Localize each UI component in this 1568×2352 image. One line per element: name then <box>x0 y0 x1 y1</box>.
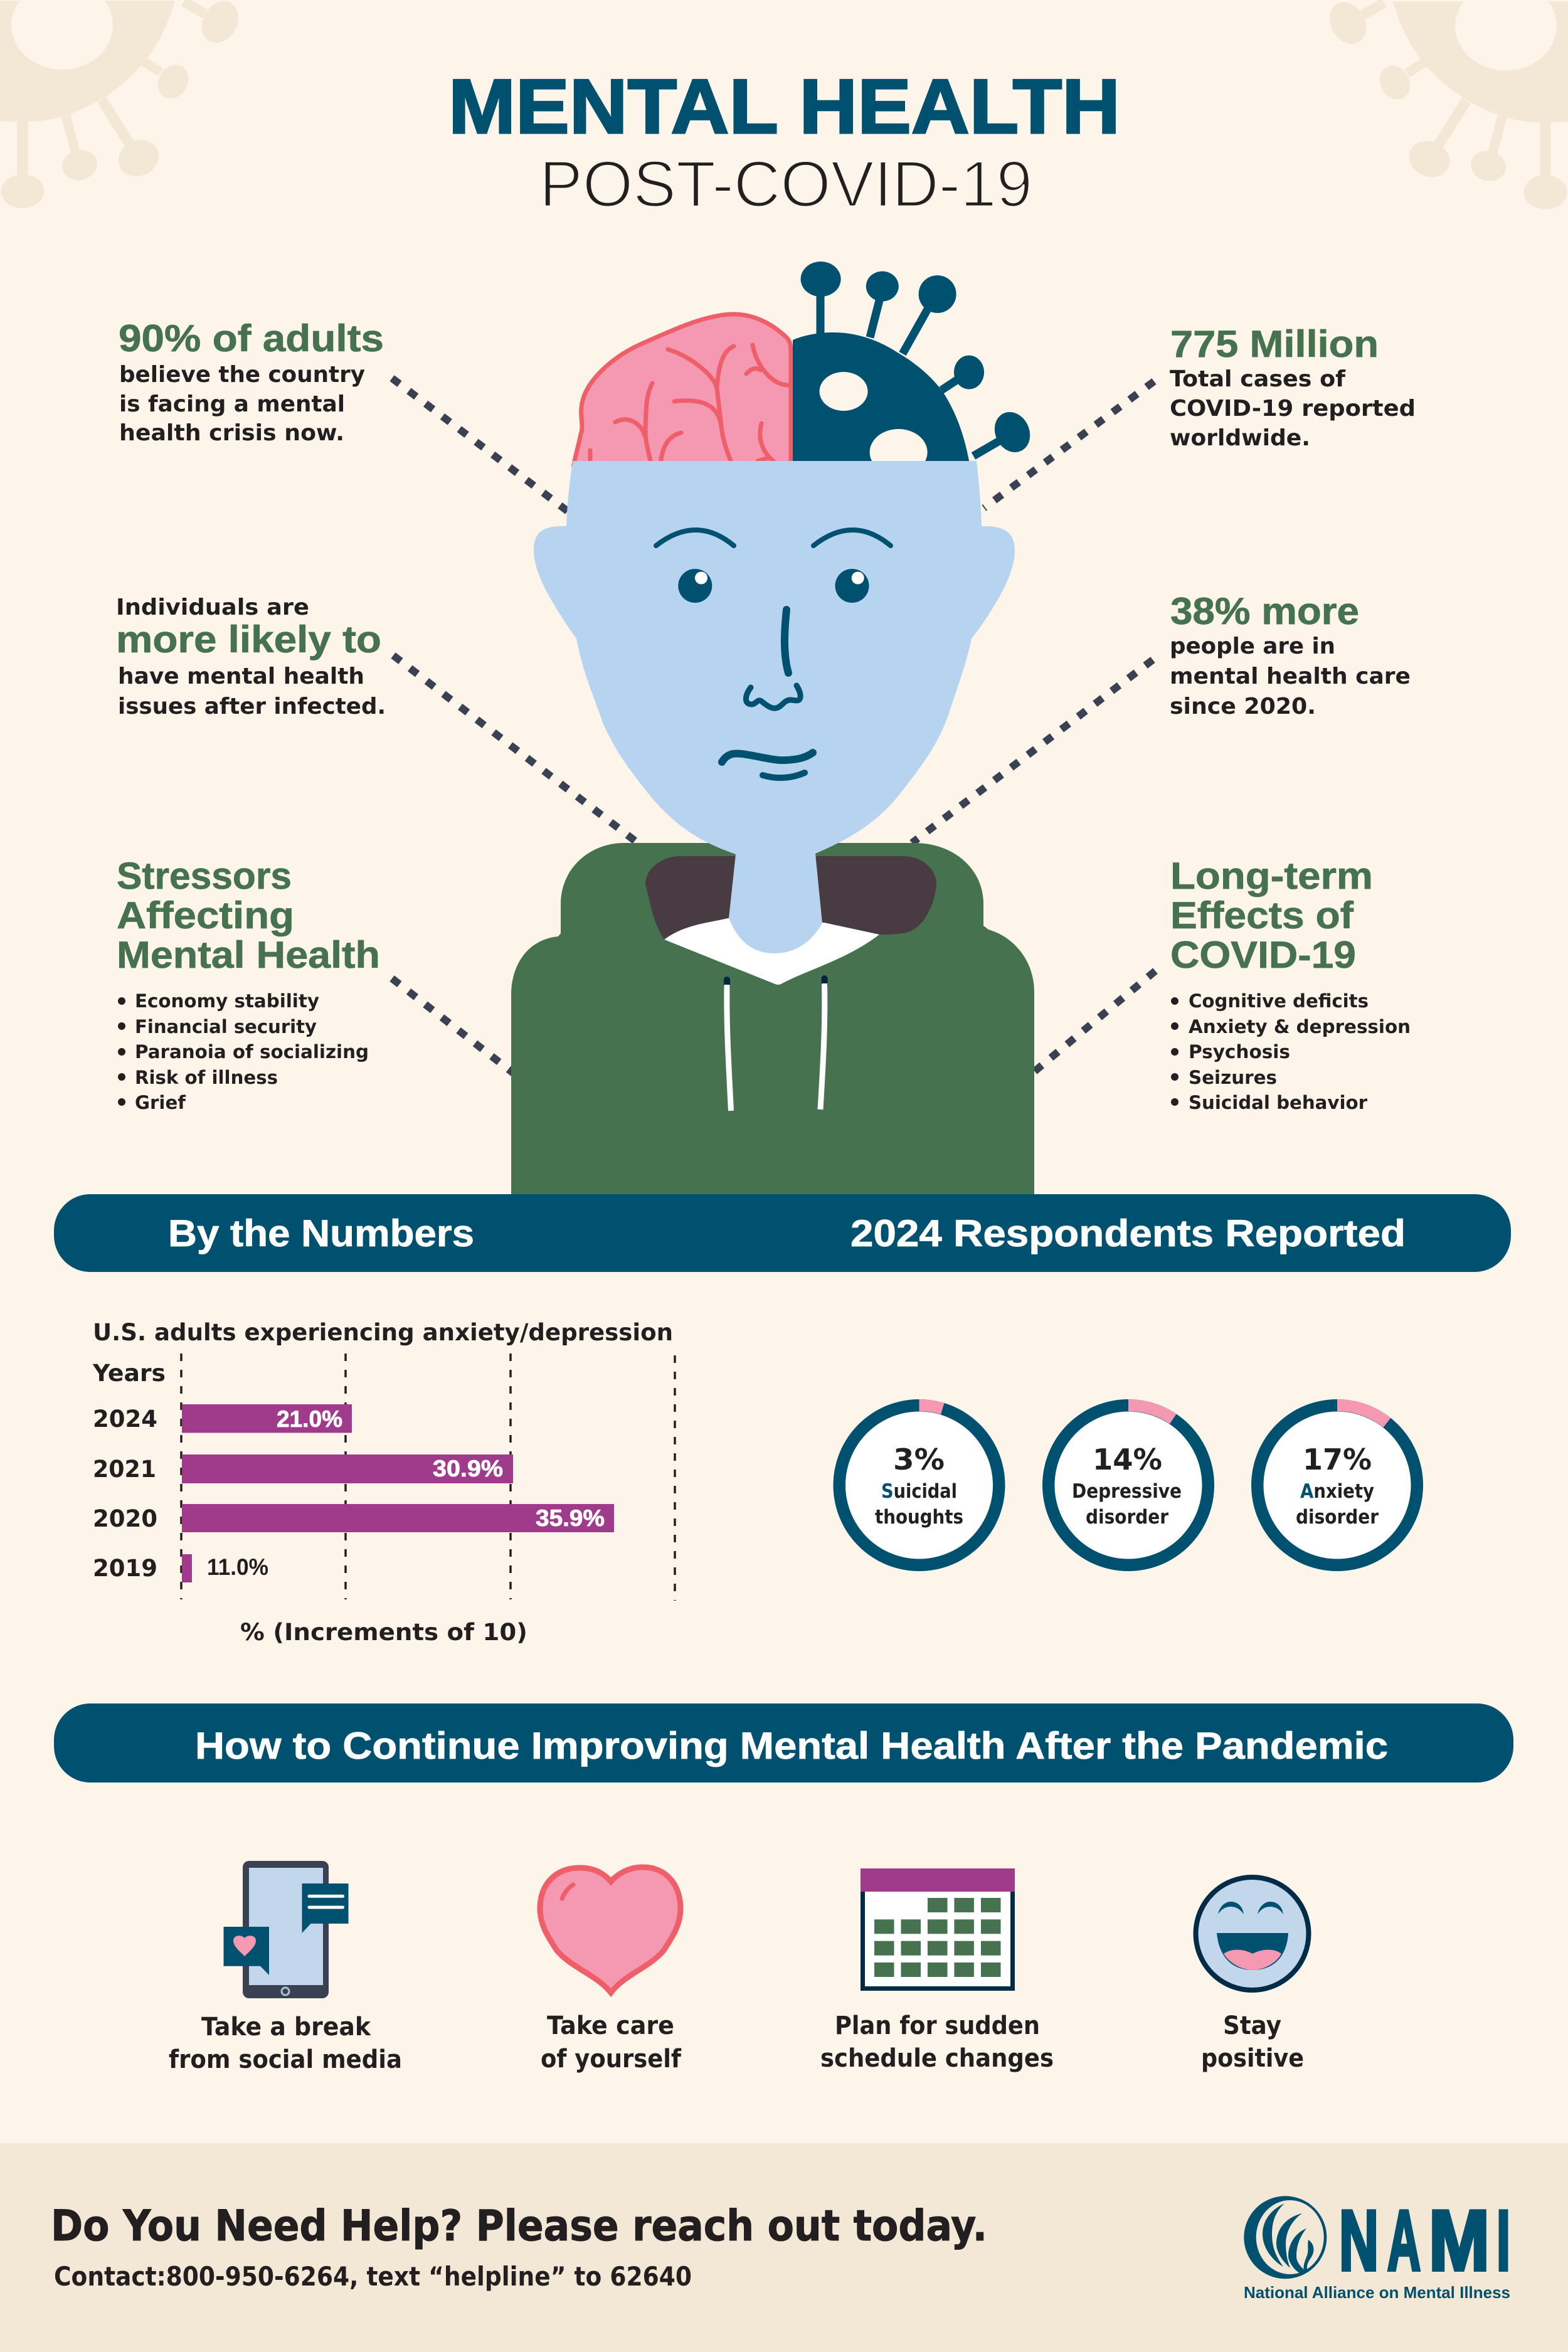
text block: 90% of adults: 90% of adults <box>119 317 384 359</box>
bar chart: U.S. adults experiencing anxiety/depression: U.S. adults experiencing anxiety/depression <box>93 1319 673 1346</box>
bar chart: U.S. adults experiencing anxiety/depression: 11.0% <box>207 1554 268 1580</box>
tip: take care: Take care <box>547 2011 674 2040</box>
icon: virus corner right <box>1322 0 1568 209</box>
donut: anxiety disorder 17%: 17% <box>1303 1443 1372 1476</box>
panel: long-term effects of covid-19: Seizures <box>1189 1067 1277 1088</box>
head <box>534 461 1015 953</box>
text block: 775 Million: 775 Million <box>1170 323 1379 365</box>
tip: take care: of yourself <box>541 2045 682 2074</box>
text block: 38% more <box>1170 590 1411 719</box>
title: MENTAL HEALTH <box>448 64 1120 150</box>
panel: stressors affecting mental health: Risk of illness <box>135 1067 278 1088</box>
icon: smiley <box>1195 1877 1308 1990</box>
footer band <box>0 2143 1568 2352</box>
bar chart: U.S. adults experiencing anxiety/depression: % (Increments of 10) <box>240 1619 527 1646</box>
donut: suicidal thoughts 3%: 3% <box>893 1443 945 1476</box>
text block: more likely to <box>116 595 386 719</box>
banner: by the numbers: By the Numbers <box>168 1212 474 1254</box>
logo: NAMI <box>1244 2193 1510 2302</box>
text block: more likely to: more likely to <box>116 618 381 660</box>
virus half <box>793 262 1036 475</box>
hood lining <box>645 856 936 940</box>
icon: virus corner left <box>0 0 246 208</box>
shirt collar <box>664 918 879 985</box>
donut: depressive disorder 14% <box>1042 1399 1214 1571</box>
donut: suicidal thoughts 3%: thoughts <box>875 1506 963 1528</box>
bar chart: U.S. adults experiencing anxiety/depression <box>92 1319 675 1646</box>
text block: 38% more: people are in <box>1170 633 1335 659</box>
logo: NAMI: N <box>1339 2193 1379 2288</box>
footer band: Do You Need Help? Please reach out today. <box>51 2201 987 2251</box>
text block: 90% of adults: is facing a mental <box>119 391 345 417</box>
panel: long-term effects of covid-19: Suicidal behavior <box>1189 1092 1368 1113</box>
bar chart: U.S. adults experiencing anxiety/depression: 2021 <box>93 1456 156 1483</box>
panel: stressors affecting mental health: Economy stability <box>135 990 319 1012</box>
illustration: person with brain and virus <box>511 262 1036 1194</box>
bar chart: U.S. adults experiencing anxiety/depression: 35.9% <box>536 1505 605 1531</box>
hoodie strings <box>727 978 825 1111</box>
text block: 775 Million: COVID-19 reported <box>1170 396 1416 421</box>
panel: stressors affecting mental health: Grief <box>135 1092 186 1113</box>
tip: social media: Take a break <box>201 2013 371 2042</box>
banner: by the numbers: 2024 Respondents Reported <box>850 1212 1406 1254</box>
title: POST-COVID-19 <box>539 148 1032 221</box>
donut: anxiety disorder 17% <box>1251 1399 1423 1571</box>
bar chart: U.S. adults experiencing anxiety/depression: 21.0% <box>277 1406 342 1432</box>
panel: long-term effects of covid-19: Effects of <box>1170 894 1354 936</box>
donut: suicidal thoughts 3%: Suicidal <box>881 1480 957 1503</box>
icon: heart <box>540 1867 681 1993</box>
panel: stressors affecting mental health: Paranoia of socializing <box>135 1041 369 1062</box>
hoodie <box>511 843 1034 1194</box>
panel: long-term effects of covid-19: Long-term <box>1170 855 1373 897</box>
bar chart: U.S. adults experiencing anxiety/depression: 2024 <box>93 1406 157 1433</box>
text block: more likely to: Individuals are <box>116 595 309 620</box>
bar chart: U.S. adults experiencing anxiety/depression: 30.9% <box>433 1456 503 1481</box>
donut: anxiety disorder 17%: disorder <box>1296 1506 1379 1528</box>
donut: suicidal thoughts 3% <box>833 1399 1005 1571</box>
tip: schedule: schedule changes <box>820 2044 1054 2073</box>
footer band: Contact:800-950-6264, text “helpline” to 62640 <box>54 2261 692 2292</box>
tip: stay positive <box>1195 1877 1308 2073</box>
banner: by the numbers <box>54 1194 1511 1272</box>
text block: 38% more: since 2020. <box>1170 694 1316 719</box>
panel: long-term effects of covid-19: Cognitive deficits <box>1189 990 1369 1012</box>
text block: 38% more: 38% more <box>1170 590 1359 632</box>
bar chart: U.S. adults experiencing anxiety/depression: 2019 <box>93 1555 157 1582</box>
tip: stay positive: positive <box>1201 2044 1304 2073</box>
text block: 90% of adults <box>119 317 384 446</box>
logo: NAMI: M <box>1429 2193 1490 2288</box>
text block: 775 Million: Total cases of <box>1170 366 1345 392</box>
donut: anxiety disorder 17%: Anxiety <box>1300 1480 1374 1503</box>
banner: how to continue improving: How to Continue Improving Mental Health After the Pandemic <box>195 1725 1388 1767</box>
panel: stressors affecting mental health: Affecting <box>117 894 294 936</box>
tip: social media: from social media <box>169 2045 402 2074</box>
text block: 90% of adults: health crisis now. <box>119 420 344 446</box>
tip: social media <box>169 1861 402 2074</box>
dotted connector lines <box>392 378 1155 1079</box>
logo: NAMI: National Alliance on Mental Illness <box>1244 2283 1510 2302</box>
text block: more likely to: have mental health <box>118 664 364 689</box>
panel: long-term effects of covid-19: Anxiety & depression <box>1189 1016 1411 1037</box>
icon: phone <box>223 1861 349 1998</box>
icon: calendar <box>861 1868 1015 1991</box>
tip: stay positive: Stay <box>1223 2011 1281 2040</box>
panel: stressors affecting mental health: Mental Health <box>117 934 380 976</box>
logo: NAMI: I <box>1496 2193 1510 2288</box>
logo: NAMI: A <box>1387 2193 1421 2288</box>
tip: take care <box>540 1867 682 2074</box>
panel: long-term effects of covid-19 <box>1170 855 1411 1113</box>
tip: schedule: Plan for sudden <box>835 2011 1040 2040</box>
text block: 775 Million: worldwide. <box>1170 425 1310 451</box>
bar chart: U.S. adults experiencing anxiety/depression: Years <box>92 1360 166 1387</box>
text block: more likely to: issues after infected. <box>118 694 386 719</box>
banner: how to continue improving <box>54 1703 1513 1783</box>
donut: depressive disorder 14%: Depressive <box>1072 1480 1182 1503</box>
donut: depressive disorder 14%: 14% <box>1093 1443 1162 1476</box>
text block: 90% of adults: believe the country <box>119 362 365 388</box>
panel: stressors affecting mental health: Financial security <box>135 1016 317 1037</box>
title <box>448 64 1120 221</box>
text block: 38% more: mental health care <box>1170 664 1411 689</box>
panel: long-term effects of covid-19: COVID-19 <box>1170 934 1356 976</box>
panel: long-term effects of covid-19: Psychosis <box>1189 1041 1290 1062</box>
brain <box>574 314 791 464</box>
panel: stressors affecting mental health: Stressors <box>117 855 292 897</box>
bar chart: U.S. adults experiencing anxiety/depression: 2020 <box>93 1505 157 1532</box>
tip: schedule <box>820 1868 1054 2073</box>
panel: stressors affecting mental health <box>117 855 380 1113</box>
face <box>656 530 891 778</box>
text block: 775 Million <box>1170 323 1416 451</box>
donut: depressive disorder 14%: disorder <box>1086 1506 1169 1528</box>
